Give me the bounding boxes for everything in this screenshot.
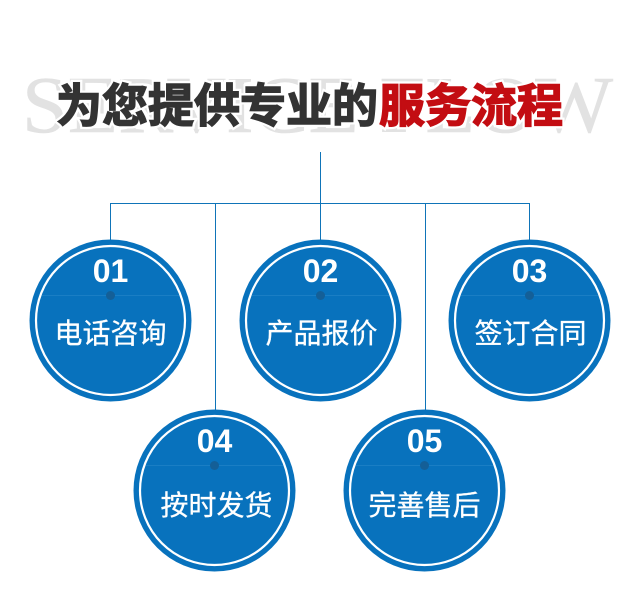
step 01: 电话咨询: [54, 318, 167, 349]
step 03: 签订合同: [474, 318, 587, 349]
title: [56, 80, 563, 132]
step 04: 04: [197, 423, 232, 459]
title: dark part: 为您提供专业的: [56, 80, 378, 132]
step 05: [344, 410, 506, 572]
step 02: [240, 240, 402, 402]
step 04: 按时发货: [160, 490, 273, 521]
step 05: 05: [407, 423, 442, 459]
step 01: 01: [93, 253, 128, 289]
step 04: [134, 410, 296, 572]
step 02: 产品报价: [265, 318, 378, 349]
step 01: [30, 240, 192, 402]
title: red part: 服务流程: [379, 80, 563, 132]
title halo: 为您提供专业的服务流程: [56, 80, 563, 132]
step 03: [448, 240, 610, 402]
connector lines: [110, 152, 530, 410]
step 03: 03: [512, 253, 547, 289]
step 02: 02: [303, 253, 338, 289]
step 05: 完善售后: [368, 490, 481, 521]
watermark: service flow: SERVICE FLOW: [22, 62, 614, 150]
